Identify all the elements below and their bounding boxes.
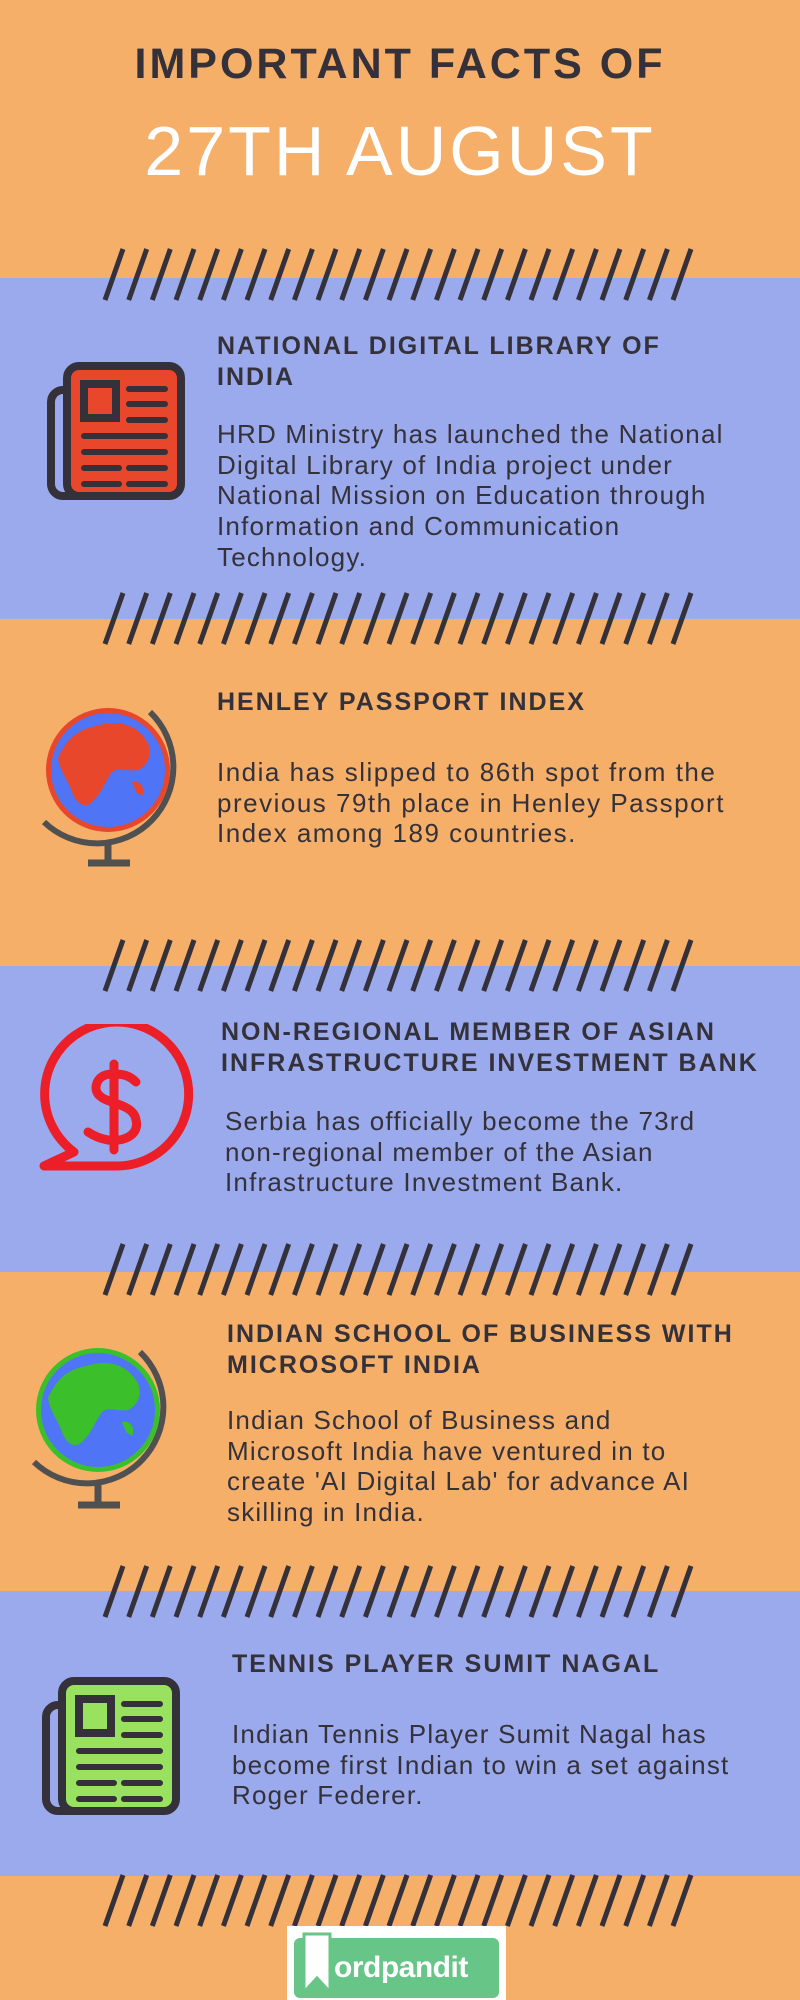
title — [135, 40, 665, 190]
section 1 text: Digital Library of India project under — [217, 450, 673, 480]
section 5 text — [232, 1650, 729, 1810]
section 5 text: Indian Tennis Player Sumit Nagal has — [232, 1719, 707, 1749]
icon: dollar speech bubble — [40, 1024, 194, 1170]
section 5 text: become first Indian to win a set against — [232, 1750, 729, 1780]
icon: globe green — [32, 1348, 166, 1508]
section 2 text — [217, 688, 725, 848]
icon: newspaper green — [42, 1677, 180, 1815]
section 4 text: MICROSOFT INDIA — [227, 1351, 482, 1379]
section 1 text: NATIONAL DIGITAL LIBRARY OF — [217, 332, 661, 360]
section 1 text: INDIA — [217, 363, 295, 391]
icon: globe red — [42, 708, 176, 866]
section 3 text: INFRASTRUCTURE INVESTMENT BANK — [221, 1049, 759, 1077]
section 4 text: Microsoft India have ventured in to — [227, 1436, 666, 1466]
section 3 text: Infrastructure Investment Bank. — [225, 1167, 623, 1197]
section 2 text: HENLEY PASSPORT INDEX — [217, 688, 586, 716]
section 2 text: India has slipped to 86th spot from the — [217, 757, 716, 787]
title: IMPORTANT FACTS OF — [135, 40, 665, 88]
section 1 text: Technology. — [217, 542, 367, 572]
section 3 text: Serbia has officially become the 73rd — [225, 1106, 695, 1136]
section 3 text — [221, 1018, 759, 1197]
section 1 text: Information and Communication — [217, 511, 620, 541]
title: 27TH AUGUST — [144, 112, 656, 190]
section 4 text: Indian School of Business and — [227, 1405, 612, 1435]
section 1 text: HRD Ministry has launched the National — [217, 419, 724, 449]
logo: wordpandit: ordpandit — [334, 1951, 468, 1984]
logo: wordpandit — [287, 1926, 506, 2000]
icon: newspaper red — [47, 362, 185, 500]
section 3 text: non-regional member of the Asian — [225, 1137, 654, 1167]
section 3 text: NON-REGIONAL MEMBER OF ASIAN — [221, 1018, 716, 1046]
section 4 text: INDIAN SCHOOL OF BUSINESS WITH — [227, 1320, 734, 1348]
section 4 text: create 'AI Digital Lab' for advance AI — [227, 1466, 690, 1496]
section 5 text: TENNIS PLAYER SUMIT NAGAL — [232, 1650, 660, 1678]
section 5 text: Roger Federer. — [232, 1780, 424, 1810]
section 1 text — [217, 332, 724, 572]
section 4 text: skilling in India. — [227, 1497, 425, 1527]
section 2 text: previous 79th place in Henley Passport — [217, 788, 725, 818]
section 1 text: National Mission on Education through — [217, 480, 707, 510]
section 4 text — [227, 1320, 734, 1527]
section 2 text: Index among 189 countries. — [217, 818, 577, 848]
